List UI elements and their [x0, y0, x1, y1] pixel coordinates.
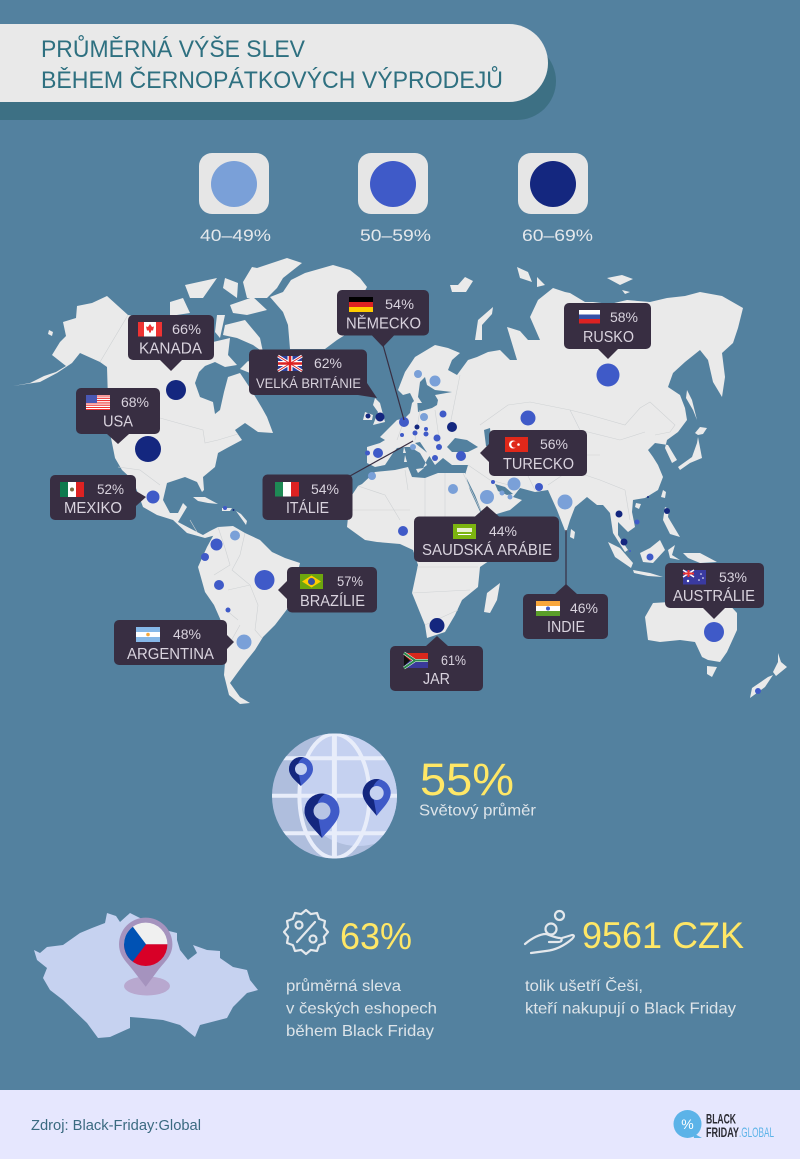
czech republic map with pin: [34, 913, 258, 1038]
legend item 40–49%: [199, 153, 271, 245]
arctic russia islands: [450, 267, 633, 340]
stat: 9561 CZK: 9561 CZK: [582, 915, 744, 956]
stat: 63 percent: v českých eshopech: [286, 1000, 437, 1018]
callout: Brazílie: BRAZÍLIE: [300, 591, 365, 610]
stat: 63 percent: [284, 910, 437, 1040]
south america: [198, 526, 300, 704]
callout: USA: [76, 388, 160, 444]
map pins: [289, 757, 391, 838]
title banner: PRŮMĚRNÁ VÝŠE SLEV: [41, 34, 305, 63]
world map: [13, 258, 787, 704]
callout: Rusko: 58%: [610, 309, 638, 325]
globe icon: [272, 734, 397, 858]
indonesia and new guinea: [608, 540, 717, 577]
icon: discount badge: [284, 910, 328, 954]
callout: Argentina: [114, 620, 234, 665]
callout: Brazílie: 57%: [337, 573, 363, 589]
world average stat: [419, 754, 537, 820]
source text: Zdroj: Black-Friday:Global: [31, 1118, 201, 1134]
legend item 40–49%: 40–49%: [200, 226, 271, 245]
footer: [0, 1090, 800, 1159]
callout: USA: 68%: [121, 394, 149, 410]
callout: USA: USA: [103, 414, 133, 430]
logo: .GLOBAL: [739, 1124, 774, 1140]
callout: Saudská Arábie: SAUDSKÁ ARÁBIE: [422, 540, 552, 559]
arctic islands: [170, 258, 302, 352]
legend: [199, 153, 593, 245]
callout: Austrálie: AUSTRÁLIE: [673, 586, 755, 605]
callout: JAR: [390, 636, 483, 691]
japan, sakhalin, taiwan, philippines: [635, 390, 707, 537]
callout: Saudská Arábie: [414, 506, 559, 562]
percent dots: [135, 364, 761, 694]
callout: Saudská Arábie: 44%: [489, 523, 517, 539]
callout: JAR: 61%: [441, 652, 466, 668]
callout: Kanada: [128, 315, 214, 371]
callout: Kanada: 66%: [172, 321, 201, 337]
czech flag: [124, 922, 168, 966]
legend item 50–59%: [358, 153, 431, 245]
country borders: [100, 315, 675, 650]
callout: Argentina: ARGENTINA: [127, 646, 214, 663]
callout: Austrálie: 53%: [719, 569, 747, 585]
caribbean islands: [193, 497, 247, 525]
africa: [347, 467, 525, 638]
north america: [13, 296, 273, 538]
callout: Velká Británie: [249, 350, 377, 398]
callout: Brazílie: [278, 567, 377, 612]
title banner: BĚHEM ČERNOPÁTKOVÝCH VÝPRODEJŮ: [41, 65, 503, 94]
logo: %: [681, 1116, 694, 1132]
callout: Itálie: [262, 441, 413, 520]
world average stat: 55%: [420, 754, 514, 805]
callout: Austrálie: [665, 563, 764, 619]
callout: Německo: NĚMECKO: [346, 314, 421, 332]
callout: Rusko: [564, 303, 651, 359]
callout: JAR: JAR: [423, 671, 450, 688]
callout: Kanada: KANADA: [139, 340, 202, 358]
callout: Itálie: ITÁLIE: [286, 498, 329, 517]
callout: Rusko: RUSKO: [583, 329, 634, 346]
callout: Mexiko: MEXIKO: [64, 500, 122, 517]
callout: Indie: [523, 530, 608, 639]
logo: FRIDAY: [706, 1124, 739, 1140]
new zealand: [750, 653, 787, 698]
greenland: [270, 265, 367, 349]
australia: [645, 600, 737, 662]
icon: hand with coins: [525, 911, 574, 953]
callout: Mexiko: 52%: [97, 481, 124, 497]
callout: Indie: INDIE: [547, 619, 585, 636]
callout: Mexiko: [50, 475, 146, 520]
logo: BLACK: [706, 1110, 736, 1126]
callout: Velká Británie: VELKÁ BRITÁNIE: [256, 376, 361, 391]
legend item 60–69%: 60–69%: [522, 226, 593, 245]
title banner: [0, 24, 556, 120]
stat: 63 percent: průměrná sleva: [286, 977, 401, 995]
callout: Velká Británie: 62%: [314, 355, 342, 371]
logo: [674, 1110, 774, 1140]
stat: 9561 CZK: tolik ušetří Češi,: [525, 976, 643, 995]
legend item 50–59%: 50–59%: [360, 226, 431, 245]
legend item 60–69%: [518, 153, 593, 245]
world average stat: Světový průměr: [419, 802, 537, 820]
callout: Německo: 54%: [385, 296, 414, 312]
stat: 63 percent: během Black Friday: [286, 1023, 434, 1040]
stat: 9561 CZK: kteří nakupují o Black Friday: [525, 1000, 736, 1018]
inland seas: [447, 428, 513, 495]
callout: Turecko: 56%: [540, 436, 568, 452]
stat: 9561 CZK: [525, 911, 744, 1018]
callout: Itálie: 54%: [311, 481, 339, 497]
callout: Turecko: TURECKO: [503, 456, 574, 473]
callout: Turecko: [480, 430, 587, 476]
callout: Indie: 46%: [570, 600, 598, 616]
callout: Argentina: 48%: [173, 626, 201, 642]
eurasia: [367, 288, 743, 552]
callout: Německo: [337, 290, 429, 420]
islands: britain, ireland, madagascar, sri lanka: [363, 398, 575, 613]
stat: 63 percent: 63%: [340, 916, 412, 957]
